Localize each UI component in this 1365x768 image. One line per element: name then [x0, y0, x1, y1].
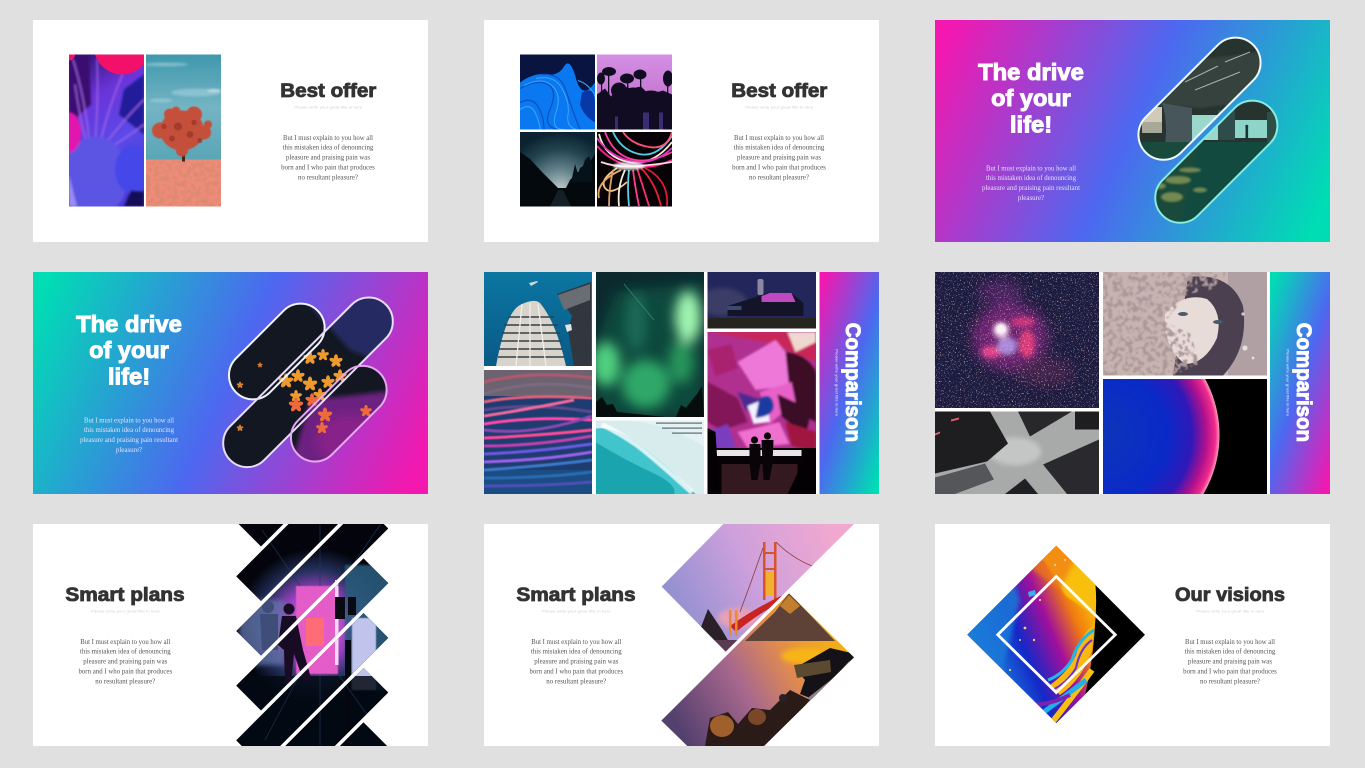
- title: The drive: [978, 59, 1084, 85]
- body text: pleasure and praising pain was: [1188, 657, 1272, 666]
- body text: But I must explain to you how all: [986, 163, 1076, 172]
- body text: pleasure and praising pain resultant: [982, 183, 1081, 192]
- slide 5: comparison, six photos: [484, 272, 879, 494]
- body text: this mistaken idea of denouncing: [531, 647, 622, 656]
- body text: But I must explain to you how all: [1185, 637, 1275, 646]
- photo: sunset shoreline: [655, 590, 860, 750]
- photo: woman behind dried flowers: [1103, 272, 1267, 376]
- body text: no resultant pleasure?: [749, 172, 810, 181]
- photo: nebula starfield: [935, 272, 1099, 408]
- photo: forest road under night sky: [520, 132, 595, 206]
- title: Best offer: [280, 81, 377, 102]
- photo in pill shapes: concrete underpass: [1139, 38, 1276, 222]
- body text: no resultant pleasure?: [298, 172, 359, 181]
- body text: [78, 637, 172, 685]
- photo in diamond: soap film planet: [967, 546, 1145, 723]
- photo: northern lights: [596, 272, 704, 417]
- body text: [80, 415, 179, 454]
- sidebar subtitle: Please write your great title in here: [1286, 349, 1290, 416]
- title: life!: [108, 363, 150, 389]
- photo: golden gate bridge at pink dusk: [662, 524, 854, 652]
- body text: pleasure and praising pain was: [83, 657, 167, 666]
- photo: aerial beach: [596, 420, 704, 494]
- photo: looking up at skyscrapers: [935, 412, 1099, 494]
- photo: round tower against blue sky: [484, 272, 592, 366]
- body text: born and I who pain that produces: [1183, 666, 1277, 676]
- photo in pill shapes: orange flowers: [224, 298, 392, 466]
- pill outline: left: [219, 294, 335, 409]
- body text: pleasure?: [116, 445, 143, 454]
- body text: [529, 637, 623, 685]
- slide 1: best offer, two photos: [33, 18, 428, 242]
- body text: [982, 163, 1081, 202]
- subtitle: Please write your great title in here: [91, 610, 160, 614]
- slide 2: best offer, four photos: [484, 20, 879, 242]
- body text: [281, 133, 375, 181]
- slide 6: comparison, four photos: [935, 272, 1330, 552]
- body text: pleasure and praising pain was: [534, 657, 618, 666]
- subtitle: Please write your great title in here: [1196, 610, 1264, 614]
- title: life!: [1010, 111, 1052, 137]
- pill outline: lower: [1145, 90, 1288, 233]
- slide 4: the drive of your life, green to magenta: [33, 272, 428, 494]
- subtitle: Please write your great title in here: [294, 106, 362, 110]
- body text: But I must explain to you how all: [84, 415, 174, 424]
- body text: no resultant pleasure?: [95, 676, 156, 685]
- body text: born and I who pain that produces: [529, 666, 623, 676]
- body text: this mistaken idea of denouncing: [734, 143, 825, 152]
- body text: pleasure and praising pain resultant: [80, 435, 179, 444]
- title: Our visions: [1175, 585, 1285, 606]
- subtitle: Please write your great title in here: [542, 610, 611, 614]
- body text: [732, 133, 826, 181]
- photo: blue and magenta sphere on black: [1103, 379, 1267, 494]
- slide 7: smart plans, diagonal strips: [33, 520, 428, 750]
- body text: But I must explain to you how all: [531, 637, 621, 646]
- sidebar subtitle: Please write your great title in here: [834, 349, 838, 416]
- sidebar: gradient panel: [1270, 272, 1330, 494]
- pill outline: right: [281, 356, 397, 471]
- body text: this mistaken idea of denouncing: [84, 425, 174, 434]
- pill outline: upper: [1128, 27, 1271, 170]
- sidebar: gradient panel: [820, 272, 879, 494]
- body text: no resultant pleasure?: [1200, 676, 1261, 685]
- diamond outline: [998, 576, 1115, 692]
- body text: born and I who pain that produces: [281, 162, 375, 172]
- body text: born and I who pain that produces: [732, 162, 826, 172]
- slide 9: our visions, diamond: [935, 524, 1330, 746]
- title: [76, 311, 182, 389]
- body text: this mistaken idea of denouncing: [1185, 647, 1276, 656]
- sidebar heading: Comparison: [841, 323, 865, 442]
- title: The drive: [76, 311, 182, 337]
- body text: this mistaken idea of denouncing: [283, 143, 374, 152]
- body text: this mistaken idea of denouncing: [80, 647, 171, 656]
- body text: born and I who pain that produces: [78, 666, 172, 676]
- sidebar heading: Comparison: [1292, 323, 1316, 442]
- title: of your: [89, 337, 169, 363]
- photo in strips: figures in neon corridor: [236, 524, 388, 746]
- body text: But I must explain to you how all: [80, 637, 170, 646]
- title: Best offer: [731, 81, 828, 102]
- body text: pleasure?: [1018, 193, 1045, 202]
- photo: red tree in coral field: [146, 54, 221, 206]
- title: Smart plans: [65, 585, 185, 606]
- subtitle: Please write your great title in here: [745, 106, 813, 110]
- body text: no resultant pleasure?: [546, 676, 607, 685]
- photo: blue waves: [520, 54, 595, 130]
- slide 8: smart plans, chevron photos: [484, 520, 879, 750]
- body text: But I must explain to you how all: [734, 133, 824, 142]
- photo: blurred pink and blue streaks: [484, 370, 592, 494]
- body text: this mistaken idea of denouncing: [986, 173, 1076, 182]
- body text: But I must explain to you how all: [283, 133, 373, 142]
- title: of your: [991, 85, 1071, 111]
- body text: pleasure and praising pain was: [737, 153, 821, 162]
- photo: skeleton on car at night: [708, 272, 816, 328]
- slide 3: the drive of your life, magenta to green: [935, 20, 1330, 242]
- photo: palm trees at dusk: [597, 54, 672, 130]
- photo: neon light trails: [597, 132, 672, 206]
- pill outline: long middle: [213, 288, 403, 477]
- photo: visitors before purple digital art: [708, 332, 816, 494]
- title: [978, 59, 1084, 137]
- body text: [1183, 637, 1277, 685]
- title: Smart plans: [516, 585, 636, 606]
- body text: pleasure and praising pain was: [286, 153, 370, 162]
- photo: purple abstract petals: [69, 54, 144, 206]
